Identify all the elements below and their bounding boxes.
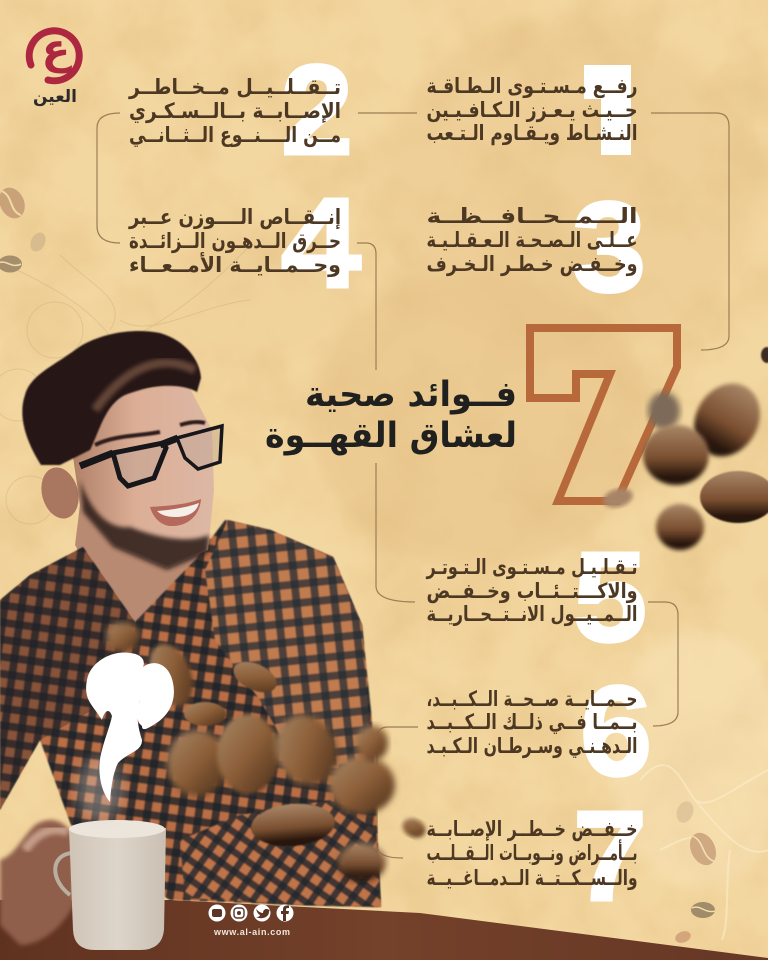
benefit 1	[426, 65, 638, 155]
neck	[75, 505, 215, 625]
decorative coffee plant, left	[0, 245, 250, 524]
number 2: 2	[281, 39, 353, 182]
blurred coffee beans, lower group	[106, 622, 429, 881]
eyebrow	[95, 422, 205, 445]
blurred coffee beans, upper right group	[601, 347, 768, 550]
benefit 6 text	[426, 687, 638, 758]
logo letter: ع	[42, 24, 73, 73]
benefit 7	[426, 785, 647, 928]
icon: coffee bean, left lower	[0, 256, 22, 272]
number 3: 3	[572, 176, 646, 319]
benefit 4	[128, 172, 361, 315]
benefit 5 text: والاكـــتــئــاب وخــفــض	[426, 579, 638, 603]
man illustration	[0, 331, 381, 945]
left hand	[0, 820, 74, 945]
benefit 5 text: الــمــيــول الانــتــحــاريــة	[426, 602, 638, 626]
title line 2: لعشاق القهــوة	[265, 416, 517, 456]
icon: youtube	[208, 904, 226, 922]
benefit 6 text: حــمــايــة صــحــة الــكــبــد،	[426, 687, 638, 711]
benefit 1 text	[426, 74, 638, 145]
hair	[22, 331, 201, 465]
icon: coffee bean, left upper	[0, 183, 30, 223]
benefit 7 text	[426, 817, 638, 890]
benefit 4 text: إنــقــاص الــــوزن عــبر	[128, 205, 341, 229]
benefit 5 text: تـقـلـيـل مـسـتـوى الـتـوتـر	[426, 555, 638, 579]
icon: dark coffee bean, right	[691, 902, 715, 918]
ear	[36, 463, 84, 523]
shirt body	[0, 520, 381, 907]
title	[265, 375, 517, 456]
benefit 4 text	[128, 205, 341, 277]
benefit 3 text: الـــمــحــافــظــة	[426, 204, 638, 228]
cup rim	[69, 820, 165, 838]
glasses	[80, 426, 222, 486]
shirt shoulder	[205, 520, 372, 770]
icon: coffee bean, right	[685, 829, 721, 869]
cup body	[69, 828, 166, 950]
icon: small coffee bean, bottom right	[674, 929, 692, 945]
decorative coffee plant, right	[640, 765, 768, 940]
icon: facebook	[276, 904, 294, 922]
hair highlight	[95, 363, 195, 410]
benefit 3 text	[426, 204, 638, 276]
benefit 7 text: بــأمــراض ونــوبــات الــقــلــب	[426, 838, 638, 865]
benefit 2 text	[128, 75, 341, 147]
beard	[80, 480, 209, 570]
website url: www.al-ain.com	[213, 927, 290, 937]
benefit 7 text: والــســكــتــة الــدمــاغــيــة	[426, 866, 638, 890]
benefit 7 text: خــفــض خــطــر الإصــابــة	[426, 817, 638, 841]
social icons	[208, 904, 294, 922]
number 6: 6	[580, 660, 652, 803]
teeth	[157, 503, 199, 517]
benefit 3 text: وخــفـض خـطـر الـخـرف	[426, 252, 638, 276]
face	[72, 383, 214, 568]
benefit 6 text: الـدهـنـي وسـرطـان الـكـبـد	[426, 734, 638, 758]
icon: faded coffee bean, right upper	[674, 799, 696, 825]
logo ring	[29, 31, 79, 81]
number 1	[584, 65, 631, 155]
title line 1: فــوائد صحية	[305, 375, 517, 415]
benefit 3 text: عــلـى الـصـحـة الـعـقـلـيـة	[426, 228, 638, 252]
big outlined seven	[530, 328, 677, 501]
shirt sleeve	[180, 800, 381, 907]
hand highlight	[25, 830, 68, 850]
coffee cup	[55, 820, 166, 950]
benefit 3	[426, 176, 646, 319]
benefit 5 text	[426, 555, 638, 626]
benefit 4 text: حــرق الــدهـون الــزائــدة	[129, 229, 341, 253]
benefit 1 text: رفــع مـسـتـوى الـطـاقـة	[426, 74, 638, 98]
benefit 4 text: وحــمــايــة الأمــعــاء	[129, 251, 341, 277]
benefit 2 text: تــقــلــيــل مــخــاطــر	[128, 75, 341, 99]
number 4: 4	[281, 172, 361, 315]
icon: faded coffee bean, left	[27, 230, 49, 254]
benefit 5	[426, 526, 647, 669]
benefit 2 text: مــن الــــنــوع الــثــانــي	[129, 123, 341, 147]
benefit 2 text: الإصــابــة بــالــسـكـري	[129, 99, 341, 124]
icon: twitter	[254, 904, 270, 922]
logo	[29, 24, 79, 107]
benefit 2	[128, 39, 353, 182]
benefit 1 text: النـشـاط ويـقـاوم الـتـعب	[426, 121, 638, 145]
number 7: 7	[573, 785, 647, 928]
shirt left shadow	[0, 547, 135, 810]
icon: instagram	[230, 904, 248, 922]
connector lines	[97, 113, 729, 858]
steam haze	[76, 758, 124, 822]
mouth	[150, 499, 201, 526]
table	[0, 900, 768, 960]
logo wordmark: العين	[33, 87, 77, 107]
benefit 6	[426, 660, 652, 803]
benefit 6 text: بــمــا فــي ذلــك الــكــبــد	[426, 710, 638, 734]
white steam	[86, 653, 174, 802]
cup handle	[55, 853, 72, 895]
benefit 1 text: حــيـث يـعـزز الـكـافـيـين	[426, 98, 638, 122]
number 5: 5	[573, 526, 647, 669]
